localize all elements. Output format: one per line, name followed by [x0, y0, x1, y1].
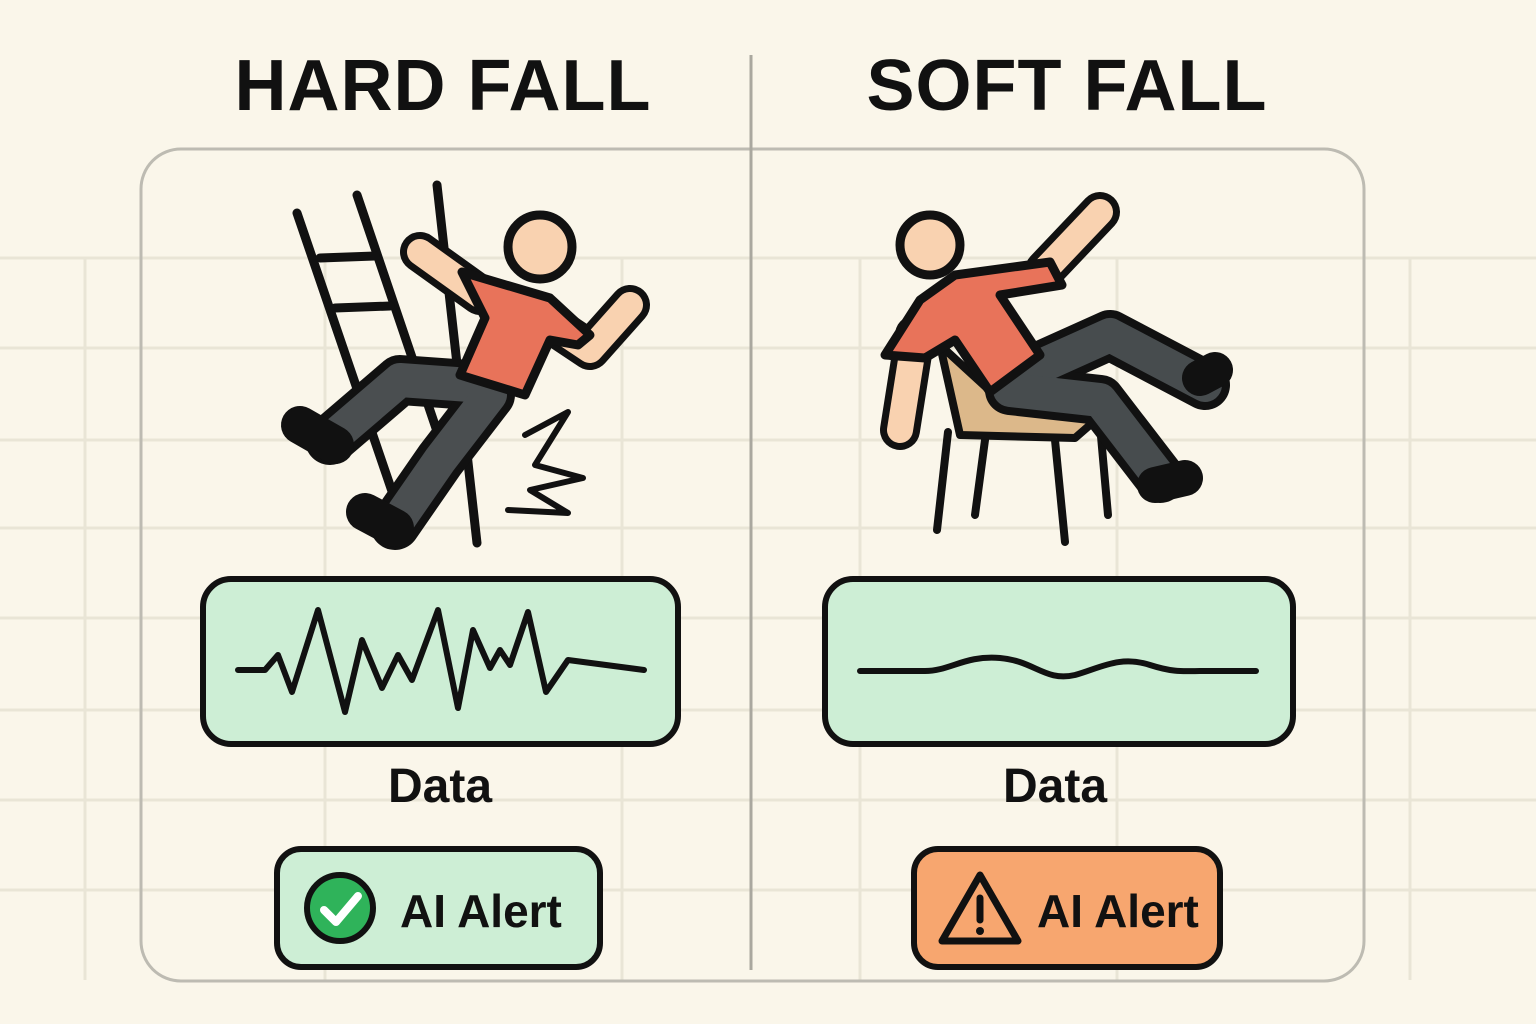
label: data right: Data — [1003, 760, 1107, 813]
button: hard fall AI alert — [277, 849, 600, 967]
title: hard fall: HARD FALL — [235, 46, 651, 126]
panel: comparison frame — [141, 149, 1364, 981]
button: soft fall AI alert — [914, 849, 1220, 967]
label: data left: Data — [388, 760, 492, 813]
button: hard fall AI alert: AI Alert — [400, 885, 562, 937]
button: soft fall AI alert: AI Alert — [1037, 885, 1199, 937]
icon: soft fall figure on chair — [885, 212, 1215, 542]
title: soft fall: SOFT FALL — [867, 46, 1267, 126]
chart: hard fall data — [203, 579, 678, 744]
icon: hard fall figure with ladder — [297, 185, 630, 543]
divider — [750, 55, 752, 970]
chart: soft fall data — [825, 579, 1293, 744]
